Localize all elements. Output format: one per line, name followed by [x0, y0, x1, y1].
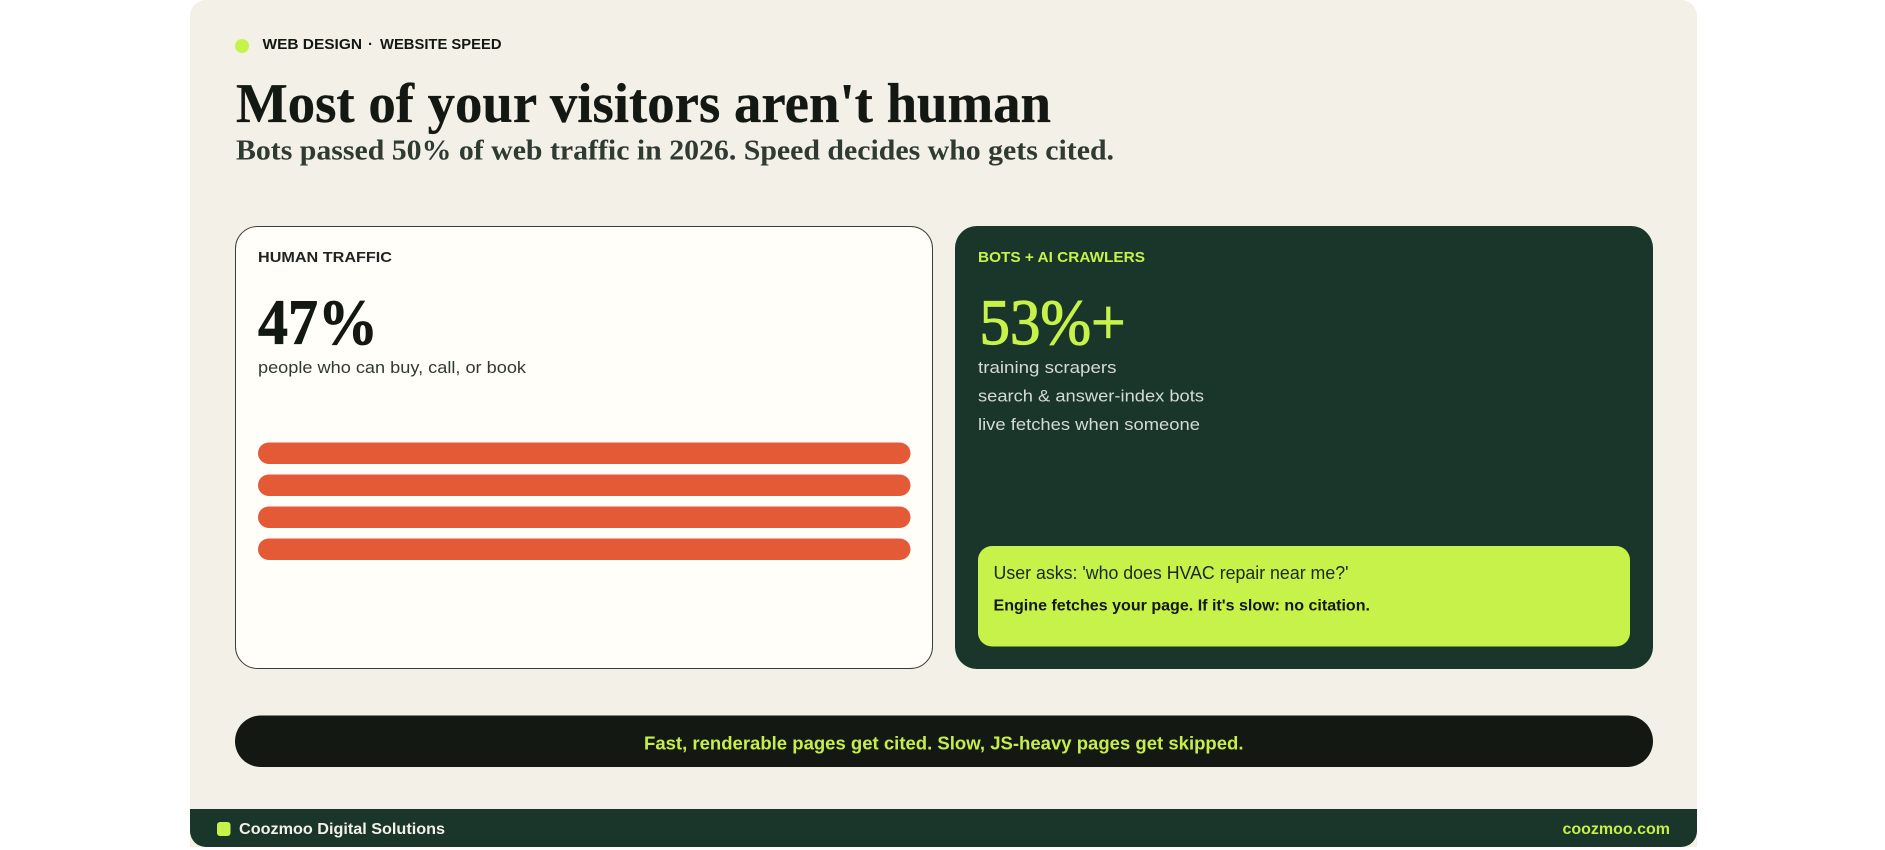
- subtitle: Bots passed 50% of web traffic in 2026. Speed decides who gets cited.: [236, 134, 1114, 166]
- bot types list: search & answer-index bots: [978, 386, 1204, 406]
- bot types list: [978, 358, 1204, 434]
- bot types list: live fetches when someone: [978, 415, 1200, 434]
- title: Most of your visitors aren't human: [236, 73, 1051, 135]
- panel label: human traffic: HUMAN TRAFFIC: [258, 249, 392, 266]
- eyebrow text: ·: [368, 36, 373, 53]
- human traffic bars: [258, 442, 910, 560]
- icon: brand square: [217, 822, 230, 836]
- callout consequence: Engine fetches your page. If it's slow: no citation.: [994, 598, 1370, 614]
- eyebrow text: WEB DESIGN: [262, 36, 362, 53]
- callout question: User asks: 'who does HVAC repair near me?': [994, 563, 1348, 583]
- panel: bots and AI crawlers: [955, 226, 1653, 669]
- icon: lime dot: [235, 39, 249, 53]
- takeaway pill: [235, 716, 1653, 767]
- stat: 47%: 47%: [258, 287, 378, 359]
- website: coozmoo.com: [1562, 821, 1670, 838]
- panel: human traffic: [236, 226, 932, 668]
- stat description: people who can buy, call, or book: [258, 358, 527, 377]
- panel label: bots + AI crawlers: BOTS + AI CRAWLERS: [978, 249, 1145, 266]
- stat: 53%+: 53%+: [980, 287, 1126, 359]
- eyebrow text: WEBSITE SPEED: [380, 36, 502, 53]
- takeaway text: Fast, renderable pages get cited. Slow, JS-heavy pages get skipped.: [644, 734, 1244, 754]
- eyebrow: [235, 36, 502, 53]
- brand name: Coozmoo Digital Solutions: [239, 821, 445, 838]
- footer bar: [190, 809, 1697, 847]
- bot types list: training scrapers: [978, 358, 1116, 377]
- slide background panel: [190, 0, 1697, 847]
- callout: user query: [978, 546, 1630, 646]
